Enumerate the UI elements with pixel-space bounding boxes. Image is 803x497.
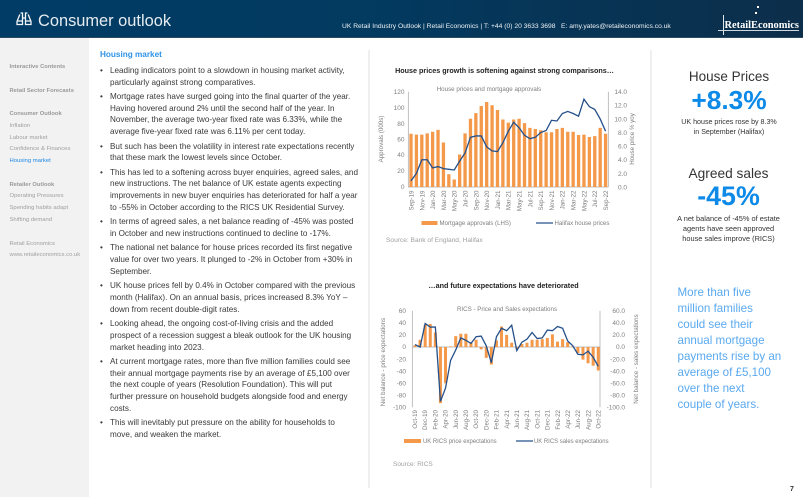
source: chart 2: Source: RICS — [393, 460, 433, 468]
x axis labels: Jan-22 — [560, 190, 567, 209]
right axis labels: -100.0 — [607, 404, 625, 412]
text block: housing market commentary: At current mortgage rates, more than five million families could see — [110, 357, 350, 366]
text block: housing market commentary: month (Halifax). On an annual basis, prices increased 8.3% YoY – — [110, 293, 347, 302]
text block: housing market commentary: average five-year fixed rate was 6.11% per cent today. — [110, 127, 305, 136]
left axis labels: 60 — [399, 308, 406, 315]
left axis labels — [393, 308, 406, 412]
text block: housing market commentary: down from recent double-digit rates. — [110, 305, 240, 314]
text block: housing market commentary: Leading indicators point to a slowdown in housing market activity, — [110, 66, 345, 75]
x axis labels: Jul-22 — [592, 190, 599, 207]
x axis labels: Jan-20 — [430, 190, 437, 209]
right axis labels — [614, 89, 627, 191]
x axis labels: Nov-20 — [484, 190, 491, 210]
text block: housing market commentary: prospect of a recession suggest a bleak outlook for the UK housing — [110, 331, 351, 340]
legend: UK RICS price expectations — [423, 439, 497, 445]
sidebar navigation: Retail Economics — [10, 241, 55, 247]
right axis labels: 0.0 — [616, 344, 625, 351]
text block: housing market commentary — [100, 50, 358, 439]
right axis labels: 8.0 — [618, 130, 627, 137]
sidebar navigation: Confidence & Finances — [10, 146, 70, 152]
right axis labels: -60.0 — [610, 380, 625, 388]
text block: housing market commentary: This will inevitably put pressure on the ability for households to — [110, 418, 335, 427]
chart heading: expectations: …and future expectations have deteriorated — [428, 280, 579, 290]
callout: mortgage payments: payments rise by an — [678, 350, 781, 363]
stat panel: house prices: UK house prices rose by 8.3% — [681, 118, 777, 126]
x axis labels: Jul-21 — [527, 190, 534, 207]
right axis labels: 40.0 — [612, 320, 625, 327]
text block: housing market commentary: particularly against strong comparatives. — [110, 78, 255, 87]
text block: housing market commentary: their annual mortgage payments rise by an average of £5,100 over — [110, 369, 350, 378]
callout: mortgage payments: More than five — [678, 286, 751, 299]
x axis labels: Apr-20 — [443, 409, 450, 429]
x axis labels: Mar-21 — [506, 190, 513, 210]
stat panel: house prices: in September (Halifax) — [694, 128, 764, 136]
stat panel: agreed sales: -45% — [697, 181, 760, 211]
left axis labels: 120 — [394, 89, 405, 96]
legend: Halifax house prices — [554, 220, 609, 227]
left axis labels: 60 — [397, 136, 405, 144]
x axis labels: Sep-19 — [408, 190, 416, 210]
right axis labels: 10.0 — [614, 116, 627, 123]
x axis labels: Aug-21 — [524, 409, 531, 430]
x axis labels: Mar-22 — [570, 190, 578, 210]
left axis labels: 40 — [399, 320, 406, 327]
x axis labels: Dec-19 — [422, 409, 429, 430]
text block: housing market commentary: November, the average two-year fixed rate was 6.33%, while the — [110, 115, 342, 124]
source: chart 1: Source: Bank of England, Halifax — [386, 236, 483, 244]
chart: RICS price and sales expectations: RICS - Price and Sales expectations — [457, 306, 557, 313]
header banner — [0, 0, 803, 38]
sidebar navigation: Labour market — [10, 135, 47, 141]
legend: Mortgage approvals (LHS) — [440, 220, 511, 227]
stat panel: agreed sales: Agreed sales — [689, 166, 768, 180]
sidebar navigation: Shifting demand — [10, 217, 52, 223]
text block: housing market commentary: improvements in new buyer enquiries has deteriorated for half a year — [110, 191, 358, 200]
x axis labels: Aug-22 — [585, 409, 592, 430]
sidebar navigation: Housing market — [10, 158, 51, 164]
x axis labels: Apr-21 — [504, 409, 511, 429]
sidebar navigation: Inflation — [10, 123, 30, 129]
logo: Retail Economics: RetailEconomics — [724, 20, 799, 30]
x axis labels: Jun-20 — [453, 409, 460, 429]
left axis labels: 0 — [401, 184, 405, 191]
text block: housing market commentary: market heading into 2023. — [110, 343, 204, 352]
x axis labels: Dec-20 — [483, 409, 490, 430]
x axis labels: Feb-21 — [494, 409, 501, 430]
text block: housing market commentary: costs. — [110, 404, 131, 413]
text block: housing market commentary: Having hovered around 2% until the second half of the year. In — [110, 104, 334, 113]
callout: mortgage payments: couple of years. — [678, 398, 759, 411]
stat panel: agreed sales — [677, 166, 780, 243]
chart: house prices and mortgage approvals: Approvals (000s) — [378, 116, 385, 162]
x axis labels: Sep-20 — [473, 190, 480, 210]
left axis labels: 40 — [397, 152, 405, 159]
text block: housing market commentary: This has led to a softening across buyer enquiries, agreed sales, and — [110, 168, 358, 177]
left axis labels: -40 — [397, 368, 406, 376]
right axis labels: 20.0 — [612, 332, 625, 339]
stat panel: agreed sales: A net balance of -45% of estate — [677, 214, 780, 223]
page title: Consumer outlook — [38, 12, 171, 30]
left axis labels: 0 — [402, 344, 406, 351]
sidebar navigation: Retail Sector Forecasts — [10, 88, 74, 94]
page number: 7 — [790, 486, 794, 492]
right axis labels: -20.0 — [610, 356, 625, 364]
stat panel: house prices — [681, 69, 777, 136]
line: Halifax house prices — [411, 99, 606, 181]
text block: housing market commentary: But such has been the volatility in interest rate expectations recently — [110, 142, 354, 151]
x axis labels: Jun-22 — [575, 409, 582, 429]
text block: housing market commentary: The national net balance for house prices recorded its first negative — [110, 243, 352, 252]
sidebar navigation: Retailer Outlook — [10, 182, 54, 188]
x axis labels: May-22 — [581, 190, 588, 211]
text block: housing market commentary: value for over two years. It plunged to -2% in October from +30% in — [110, 255, 352, 264]
legend — [422, 220, 609, 227]
right axis labels: 60.0 — [612, 308, 625, 315]
x axis labels: Jun-21 — [514, 409, 521, 429]
stat panel: house prices: House Prices — [689, 69, 769, 84]
callout: mortgage payments: average of £5,100 — [678, 366, 771, 379]
right axis labels: 12.0 — [614, 103, 627, 110]
x axis labels: Oct-22 — [596, 409, 603, 429]
text block: housing market commentary: the next couple of years (Resolution Foundation). This will put — [110, 380, 332, 389]
line: sales expectations — [415, 323, 598, 401]
callout: mortgage payments: over the next — [678, 382, 745, 395]
text block: housing market commentary: Mortgage rates have surged going into the final quarter of the year. — [110, 92, 350, 101]
right axis labels: 0.0 — [618, 184, 627, 191]
legend — [404, 439, 609, 445]
chart: house prices and mortgage approvals — [378, 86, 636, 227]
x axis labels: Feb-22 — [555, 409, 562, 430]
x axis labels: May-21 — [516, 190, 524, 211]
icon: binoculars — [16, 12, 32, 26]
text block: housing market commentary: further pressure on household budgets alongside food and energy — [110, 392, 348, 401]
bars: mortgage approvals — [411, 102, 606, 187]
x axis labels: Sep-21 — [538, 190, 545, 210]
text block: housing market commentary: new instructions. The net balance of UK estate agents expecting — [110, 179, 342, 188]
left axis labels: 20 — [399, 332, 406, 339]
sidebar navigation: Spending habits adapt — [10, 205, 68, 211]
chart: house prices and mortgage approvals: House prices and mortgage approvals — [437, 86, 541, 93]
x axis labels: Sep-22 — [603, 190, 610, 210]
x axis labels: Nov-21 — [549, 190, 556, 210]
text block: housing market commentary: Housing market — [100, 50, 162, 59]
x axis labels: Nov-19 — [419, 190, 426, 210]
text block: housing market commentary: September. — [110, 267, 152, 276]
x axis labels — [408, 190, 610, 211]
x axis labels: Oct-21 — [534, 409, 541, 429]
callout: mortgage payments: annual mortgage — [678, 334, 765, 347]
chart heading: house prices: House prices growth is softening against strong comparisons… — [395, 66, 614, 75]
callout: mortgage payments: million families — [678, 302, 753, 315]
left axis labels: -80 — [397, 392, 406, 400]
text block: housing market commentary: UK house prices fell by 0.4% in October compared with the previous — [110, 281, 355, 290]
x axis labels: Jul-20 — [462, 190, 470, 207]
x axis labels: Apr-22 — [565, 409, 572, 429]
right axis labels: 4.0 — [618, 157, 627, 164]
text block: housing market commentary: move, and weaken the market. — [110, 430, 221, 439]
callout: mortgage payments: could see their — [678, 318, 753, 331]
x axis labels: Dec-21 — [545, 409, 552, 430]
bars: price expectations — [415, 324, 598, 403]
sidebar navigation: Interactive Contents — [10, 64, 65, 70]
left axis labels: 100 — [394, 105, 405, 112]
left axis labels: -60 — [397, 380, 406, 388]
right axis labels: 6.0 — [618, 144, 627, 150]
text block: housing market commentary: that these mark the lowest levels since October. — [110, 153, 282, 162]
x axis labels: Oct-19 — [412, 409, 419, 429]
stat panel: agreed sales: agents have seen approved — [683, 224, 774, 233]
right axis labels: -40.0 — [610, 368, 625, 376]
x axis labels: Oct-20 — [473, 409, 480, 429]
left axis labels: -100 — [393, 404, 406, 412]
right axis labels: 2.0 — [618, 171, 627, 178]
x axis labels: Jan-21 — [495, 190, 502, 209]
sidebar navigation — [0, 38, 89, 497]
sidebar navigation: Operating Pressures — [10, 193, 64, 199]
right axis labels: 14.0 — [614, 89, 627, 96]
sidebar navigation: Consumer Outlook — [10, 111, 62, 117]
left axis labels: 80 — [397, 121, 405, 128]
callout: mortgage payments — [678, 286, 781, 411]
text block: housing market commentary: in October and new instructions continued to decline to -17%. — [110, 229, 331, 238]
right axis labels — [607, 308, 625, 412]
sidebar navigation: www.retaileconomics.co.uk — [10, 252, 80, 258]
legend: UK RICS sales expectations — [534, 439, 609, 445]
left axis labels: -20 — [397, 356, 406, 364]
x axis labels: Feb-20 — [432, 409, 439, 430]
left axis labels — [394, 89, 405, 191]
x axis labels — [412, 409, 603, 430]
left axis labels: 20 — [397, 168, 405, 175]
text block: housing market commentary: In terms of agreed sales, a net balance reading of -45% was posted — [110, 217, 353, 226]
text block: housing market commentary: to -55% in October according to the RICS UK Residential Survey. — [110, 203, 345, 212]
stat panel: house prices: +8.3% — [691, 85, 767, 115]
contact details: UK Retail Industry Outlook | Retail Economics | T: +44 (0) 20 3633 3698 E: amy.yates@retaileconomics.co.uk — [342, 23, 671, 30]
chart: RICS price and sales expectations: Net balance - sales expectations — [633, 314, 640, 404]
x axis labels: May-20 — [452, 190, 459, 211]
x axis labels: Mar-20 — [441, 190, 448, 210]
text block: housing market commentary: Looking ahead, the ongoing cost-of-living crisis and the added — [110, 319, 333, 328]
chart: house prices and mortgage approvals: House price % yoy — [629, 112, 636, 165]
stat panel: agreed sales: house sales improve (RICS) — [682, 234, 775, 243]
chart: RICS price and sales expectations — [380, 306, 640, 445]
chart: RICS price and sales expectations: Net balance - price expectations — [380, 318, 387, 406]
x axis labels: Aug-20 — [463, 409, 470, 430]
right axis labels: -80.0 — [610, 392, 625, 400]
